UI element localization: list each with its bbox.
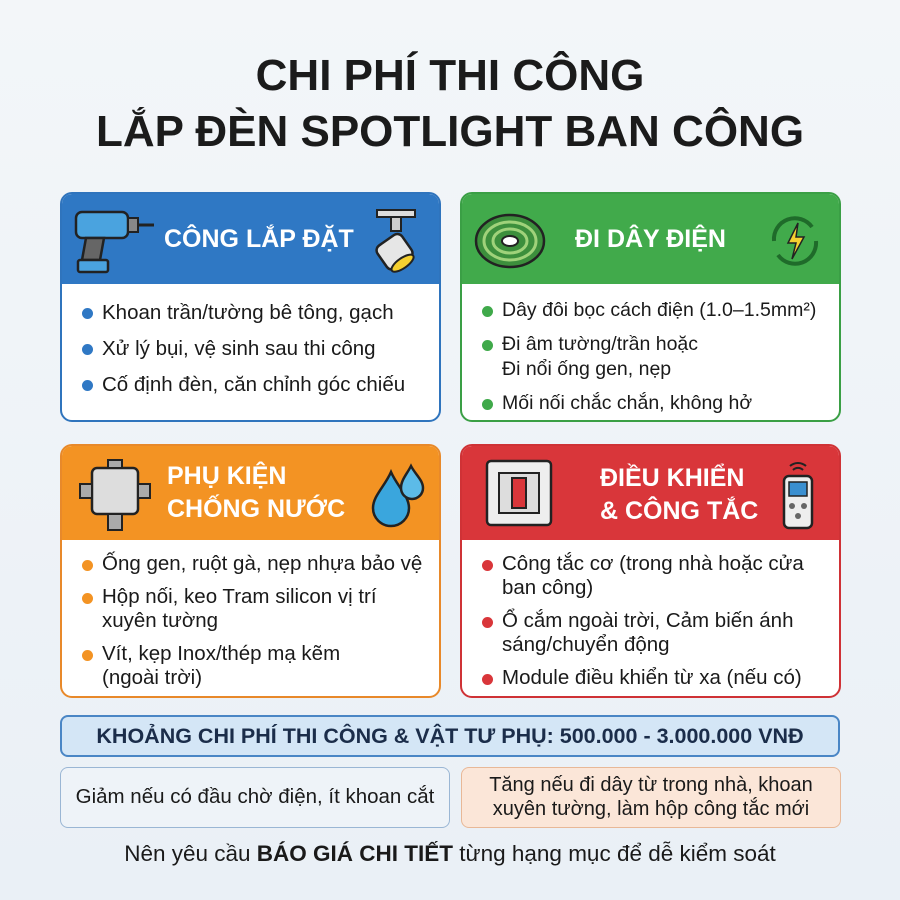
note: increase: xuyên tường, làm hộp công tắc mới bbox=[493, 798, 809, 820]
panel: dieu khien: sáng/chuyển động bbox=[502, 633, 670, 656]
panel: phu kien chong nuoc: xuyên tường bbox=[102, 609, 218, 632]
icon: drill bbox=[74, 210, 154, 274]
icon: junction box bbox=[79, 459, 151, 531]
header: dieu khien: ĐIỀU KHIỂN bbox=[600, 464, 744, 492]
panel: phu kien chong nuoc bbox=[60, 444, 441, 698]
panel: di day dien bbox=[460, 192, 841, 422]
panel: dieu khien bbox=[460, 444, 841, 698]
panel: phu kien chong nuoc: (ngoài trời) bbox=[102, 666, 202, 689]
icon: power cycle bbox=[772, 216, 818, 266]
header: dieu khien bbox=[462, 446, 839, 540]
icon: remote bbox=[782, 462, 814, 530]
panel: di day dien: Đi âm tường/trần hoặc bbox=[502, 333, 698, 355]
panel: dieu khien: Công tắc cơ (trong nhà hoặc cửa bbox=[502, 552, 804, 575]
panel: dieu khien: Module điều khiển từ xa (nếu có) bbox=[502, 666, 802, 689]
cost range bar bbox=[60, 715, 840, 757]
panel: dieu khien: ban công) bbox=[502, 576, 593, 599]
note: decrease bbox=[60, 767, 450, 828]
icon: switch bbox=[486, 460, 552, 526]
panel: di day dien: Đi nổi ống gen, nẹp bbox=[502, 358, 671, 380]
icon: water drops bbox=[372, 463, 424, 528]
title: CHI PHÍ THI CÔNG bbox=[256, 51, 644, 100]
header: dieu khien: & CÔNG TẮC bbox=[600, 497, 758, 525]
panel: di day dien: Mối nối chắc chắn, không hở bbox=[502, 392, 752, 414]
header: phu kien bbox=[62, 446, 439, 540]
header: cong lap dat: CÔNG LẮP ĐẶT bbox=[164, 225, 354, 253]
panel: phu kien chong nuoc: Hộp nối, keo Tram silicon vị trí bbox=[102, 585, 377, 608]
title bbox=[96, 51, 804, 156]
panel: di day dien: Dây đôi bọc cách điện (1.0–1.5mm²) bbox=[502, 299, 816, 321]
note: increase: Tăng nếu đi dây từ trong nhà, khoan bbox=[489, 774, 813, 796]
icon: spotlight bbox=[375, 209, 416, 273]
note: decrease: Giảm nếu có đầu chờ điện, ít khoan cắt bbox=[76, 785, 434, 808]
panel: cong lap dat: Xử lý bụi, vệ sinh sau thi công bbox=[102, 337, 376, 360]
panel: phu kien chong nuoc: Ống gen, ruột gà, nẹp nhựa bảo vệ bbox=[102, 552, 422, 575]
header: di day dien: ĐI DÂY ĐIỆN bbox=[575, 225, 726, 253]
panel: cong lap dat: Khoan trần/tường bê tông, gạch bbox=[102, 301, 394, 324]
header: phu kien: PHỤ KIỆN bbox=[167, 462, 286, 490]
panel: phu kien chong nuoc: Vít, kẹp Inox/thép mạ kẽm bbox=[102, 642, 340, 665]
panel: cong lap dat bbox=[60, 192, 441, 422]
header: phu kien: CHỐNG NƯỚC bbox=[167, 495, 345, 523]
note: increase bbox=[461, 767, 841, 828]
title: LẮP ĐÈN SPOTLIGHT BAN CÔNG bbox=[96, 107, 804, 156]
cost range bar: KHOẢNG CHI PHÍ THI CÔNG & VẬT TƯ PHỤ: 500.000 - 3.000.000 VNĐ bbox=[96, 724, 804, 748]
header: di day dien bbox=[462, 194, 839, 284]
panel: cong lap dat: Cố định đèn, căn chỉnh góc chiếu bbox=[102, 373, 405, 396]
panel: dieu khien: Ổ cắm ngoài trời, Cảm biến ánh bbox=[502, 609, 793, 632]
icon: cable coil bbox=[474, 214, 546, 268]
header: cong lap dat bbox=[62, 194, 439, 284]
footer text: Nên yêu cầu BÁO GIÁ CHI TIẾT từng hạng mục để dễ kiểm soát bbox=[124, 841, 776, 866]
